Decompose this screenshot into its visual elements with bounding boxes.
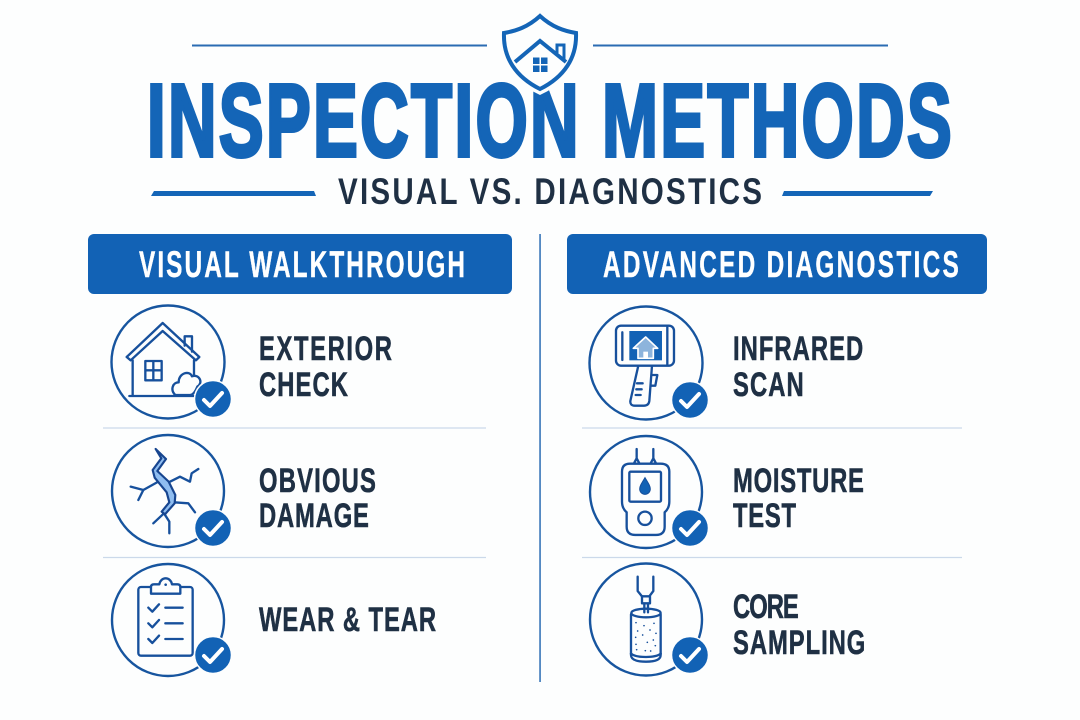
divider [103, 427, 486, 429]
label: wear and tear: WEAR & TEAR [259, 601, 436, 639]
heading: visual walkthrough [88, 234, 512, 294]
item: moisture test [590, 436, 864, 548]
subtitle rule right [782, 191, 933, 196]
badge: check [672, 382, 708, 418]
panel: visual walkthrough [88, 234, 512, 676]
icon: shield with house [503, 14, 578, 90]
top rule left [192, 44, 487, 46]
badge: check [194, 380, 232, 418]
icon: thermal camera [616, 326, 674, 406]
label: infrared scan [733, 330, 863, 404]
label: infrared scan: INFRARED [733, 330, 863, 368]
subtitle rule left [151, 191, 316, 196]
heading: visual walkthrough: VISUAL WALKTHROUGH [139, 244, 465, 285]
label: obvious damage [259, 462, 376, 535]
panel: advanced diagnostics [567, 234, 987, 676]
item: infrared scan [590, 306, 863, 420]
divider [582, 556, 962, 558]
icon: core sample [631, 577, 661, 662]
label: exterior check: EXTERIOR [259, 330, 392, 368]
icon: clipboard [138, 578, 193, 656]
badge: check [672, 510, 708, 546]
divider [582, 427, 962, 429]
badge: check [672, 636, 708, 674]
subtitle: VISUAL VS. DIAGNOSTICS [338, 172, 762, 213]
label: infrared scan: SCAN [733, 366, 804, 404]
item: wear and tear [112, 564, 436, 676]
top rule right [593, 44, 888, 46]
label: moisture test: TEST [733, 497, 796, 535]
divider [103, 556, 486, 558]
label: exterior check [259, 330, 392, 404]
label: moisture test [733, 462, 864, 535]
label: moisture test: MOISTURE [733, 462, 864, 500]
heading: advanced diagnostics: ADVANCED DIAGNOSTICS [603, 244, 959, 285]
item: core sampling [590, 564, 865, 676]
badge: check [194, 510, 232, 546]
label: core sampling: SAMPLING [733, 624, 865, 662]
label: obvious damage: DAMAGE [259, 497, 369, 535]
icon: moisture meter [622, 449, 669, 535]
icon: house [127, 323, 200, 396]
badge: check [194, 636, 232, 674]
item: exterior check [112, 306, 392, 418]
heading: advanced diagnostics [567, 234, 987, 294]
item: obvious damage [112, 435, 376, 547]
center divider [539, 234, 541, 682]
label: obvious damage: OBVIOUS [259, 462, 376, 500]
label: core sampling [733, 588, 865, 662]
label: core sampling: CORE [733, 588, 799, 626]
title: INSPECTION METHODS [147, 64, 952, 179]
label: exterior check: CHECK [259, 366, 348, 404]
icon: crack [131, 449, 198, 533]
